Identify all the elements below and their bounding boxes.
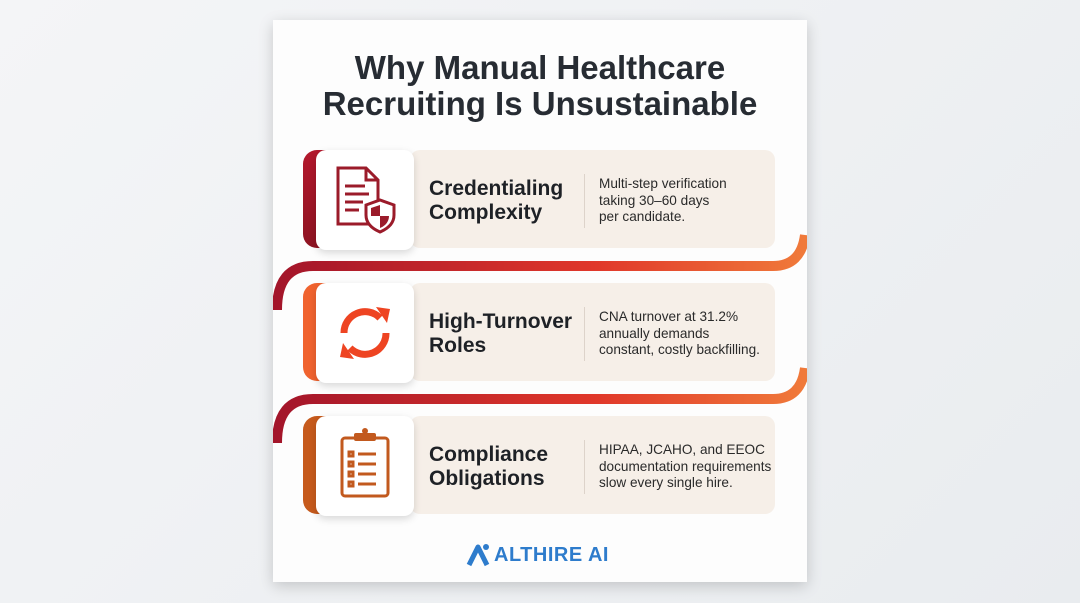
connector bands <box>273 234 807 443</box>
logo: ALTHIRE AI <box>494 544 609 566</box>
icon: document shield <box>316 150 414 250</box>
row: turnover <box>303 283 775 389</box>
description: HIPAA, JCAHO, and EEOC <box>599 442 765 457</box>
title: Why Manual Healthcare <box>355 49 725 86</box>
description: per candidate. <box>599 209 685 224</box>
description: constant, costly backfilling. <box>599 342 760 357</box>
title <box>323 49 757 122</box>
heading: Complexity <box>429 201 542 224</box>
heading <box>429 310 572 357</box>
description: CNA turnover at 31.2% <box>599 309 738 324</box>
icon: refresh arrows <box>316 283 414 383</box>
description <box>599 176 727 224</box>
description: slow every single hire. <box>599 475 733 490</box>
description: Multi-step verification <box>599 176 727 191</box>
heading <box>429 443 548 490</box>
heading: Credentialing <box>429 177 563 200</box>
row: compliance <box>303 416 775 522</box>
description: annually demands <box>599 326 709 340</box>
description: documentation requirements <box>599 458 771 474</box>
description <box>599 309 760 357</box>
row: credentialing <box>303 150 775 256</box>
heading <box>429 177 563 224</box>
description <box>599 442 771 490</box>
description: taking 30–60 days <box>599 192 709 208</box>
heading: Compliance <box>429 443 548 466</box>
heading: Obligations <box>429 467 544 490</box>
panel: card <box>273 20 807 582</box>
title: Recruiting Is Unsustainable <box>323 85 757 122</box>
heading: High-Turnover <box>429 310 572 333</box>
icon: clipboard <box>316 416 414 516</box>
heading: Roles <box>429 334 486 357</box>
